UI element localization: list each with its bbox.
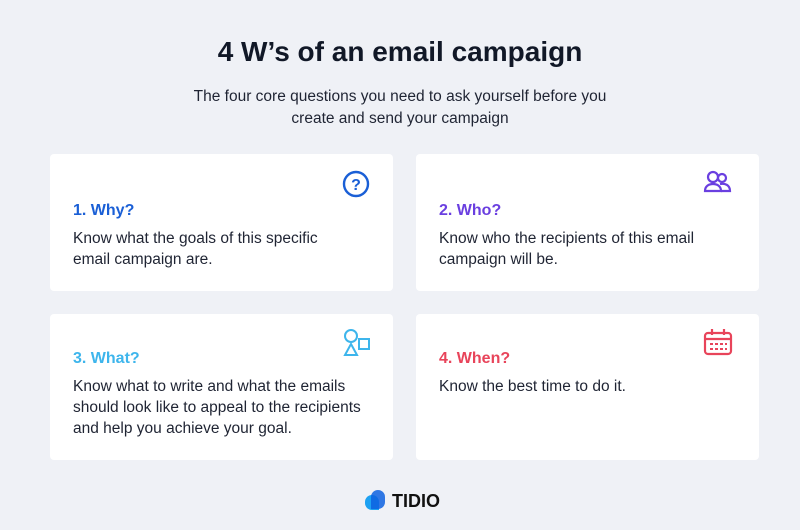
icon: tidio <box>365 490 385 510</box>
text: Know the best time to do it. <box>439 378 626 395</box>
panel: when <box>416 314 759 460</box>
subtitle: create and send your campaign <box>291 110 509 127</box>
icon: people <box>704 170 732 192</box>
text: campaign will be. <box>439 251 558 268</box>
text <box>439 230 694 268</box>
title: 4 W’s of an email campaign <box>218 36 582 67</box>
text: Know what the goals of this specific <box>73 230 318 247</box>
panel: why <box>50 154 393 291</box>
icon: question: ? <box>351 177 361 194</box>
text: email campaign are. <box>73 251 213 268</box>
icon: shapes <box>343 329 370 356</box>
text: Know who the recipients of this email <box>439 230 694 247</box>
text: should look like to appeal to the recipients <box>73 399 361 416</box>
icon: calendar <box>704 329 732 356</box>
subtitle <box>194 88 606 127</box>
heading: 1. Why? <box>73 202 134 219</box>
panel: who <box>416 154 759 291</box>
panel: what <box>50 314 393 460</box>
heading: 2. Who? <box>439 202 501 219</box>
icon: question <box>342 170 370 198</box>
heading: 3. What? <box>73 350 140 367</box>
subtitle: The four core questions you need to ask yourself before you <box>194 88 606 105</box>
brand text: TIDIO <box>392 491 440 511</box>
logo <box>365 490 440 511</box>
heading: 4. When? <box>439 350 510 367</box>
text: and help you achieve your goal. <box>73 420 292 437</box>
text <box>73 230 318 268</box>
text <box>73 378 361 437</box>
text: Know what to write and what the emails <box>73 378 345 395</box>
